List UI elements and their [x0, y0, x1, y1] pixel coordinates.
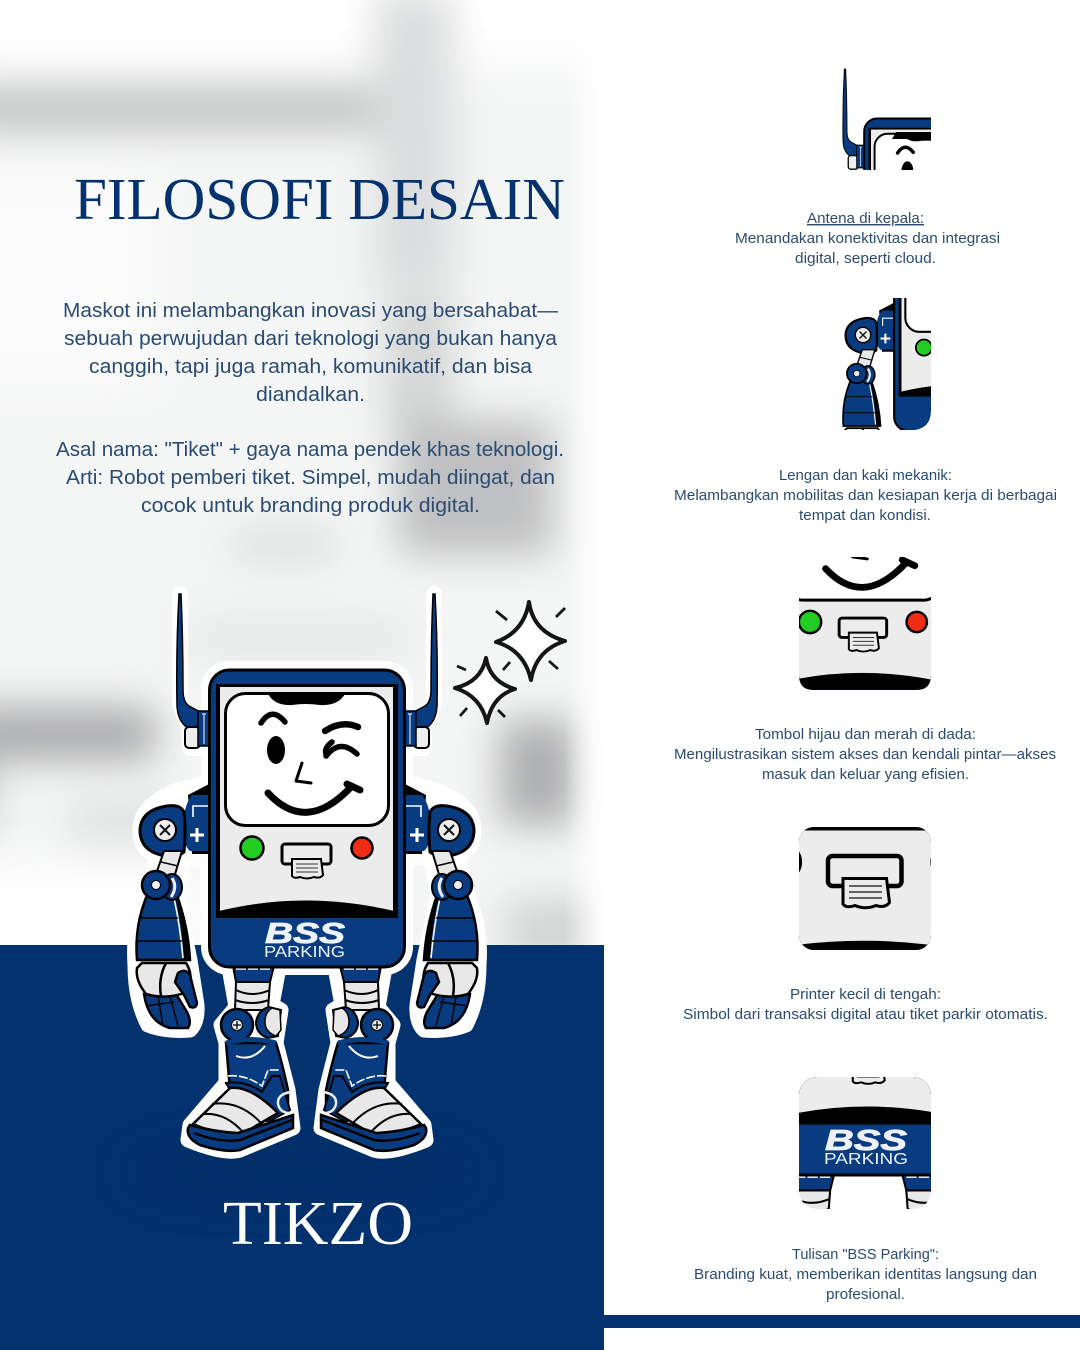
title: FILOSOFI DESAIN: [74, 166, 565, 232]
caption: buttons: [674, 727, 1056, 783]
intro paragraph: sebuah perwujudan dari teknologi yang bukan hanya: [64, 328, 558, 350]
caption: arms and legs: Lengan dan kaki mekanik:: [779, 468, 952, 484]
caption: antenna: [735, 211, 1000, 267]
caption: antenna: Menandakan konektivitas dan integrasi: [735, 231, 1000, 247]
PARKING label on mascot: PARKING: [264, 944, 345, 961]
icon: BSS logo detail: [799, 1077, 931, 1209]
caption: printer: Printer kecil di tengah:: [790, 987, 941, 1003]
mascot artwork: [136, 594, 478, 1151]
icon: printer detail: [799, 827, 931, 950]
mascot sticker outline: [135, 594, 479, 1151]
caption: branding: Tulisan "BSS Parking":: [792, 1247, 939, 1263]
caption: branding: Branding kuat, memberikan identitas langsung dan: [694, 1267, 1037, 1283]
soft shadow under the mascot: [120, 1142, 480, 1202]
icon: antenna detail: [842, 68, 931, 170]
name explanation paragraph: cocok untuk branding produk digital.: [141, 495, 480, 517]
intro paragraph: [63, 300, 558, 406]
intro paragraph: canggih, tapi juga ramah, komunikatif, dan bisa: [89, 356, 533, 378]
name explanation paragraph: Arti: Robot pemberi tiket. Simpel, mudah diingat, dan: [66, 467, 555, 489]
name explanation paragraph: Asal nama: "Tiket" + gaya nama pendek khas teknologi.: [56, 439, 564, 461]
caption: buttons: masuk dan keluar yang efisien.: [762, 767, 969, 783]
caption: antenna: digital, seperti cloud.: [795, 251, 936, 267]
intro paragraph: Maskot ini melambangkan inovasi yang bersahabat—: [63, 300, 558, 322]
icon: sparkles: [455, 602, 565, 723]
caption: printer: [683, 987, 1048, 1023]
mascot name: TIKZO: [223, 1190, 413, 1258]
caption: arms and legs: [674, 468, 1057, 524]
caption: antenna: Antena di kepala:: [807, 211, 924, 227]
intro paragraph: diandalkan.: [256, 384, 365, 406]
BSS logo on mascot: BSS: [265, 918, 346, 950]
bottom-left navy panel: [0, 945, 604, 1350]
right bottom navy strip: [604, 1315, 1080, 1328]
mascot robot: [135, 594, 479, 1151]
caption: printer: Simbol dari transaksi digital atau tiket parkir otomatis.: [683, 1007, 1048, 1023]
caption: branding: [694, 1247, 1037, 1303]
caption: branding: profesional.: [826, 1287, 905, 1303]
caption: arms and legs: tempat dan kondisi.: [799, 508, 931, 524]
icon: BSS logo detail: BSS: [825, 1125, 908, 1157]
icon: chest buttons detail: [799, 557, 931, 690]
background photo: [0, 0, 595, 945]
caption: buttons: Tombol hijau dan merah di dada:: [755, 727, 976, 743]
icon: arm and leg detail: [842, 298, 931, 430]
caption: arms and legs: Melambangkan mobilitas dan kesiapan kerja di berbagai: [674, 488, 1057, 504]
icon: BSS logo detail: PARKING: [824, 1151, 908, 1168]
name explanation paragraph: [56, 439, 564, 517]
caption: buttons: Mengilustrasikan sistem akses dan kendali pintar—akses: [674, 747, 1056, 763]
